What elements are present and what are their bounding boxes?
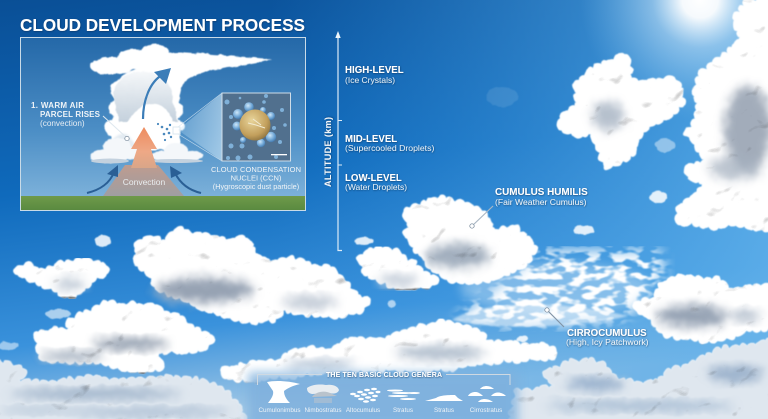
label: high level: (Ice Crystals) bbox=[345, 75, 395, 85]
cloud: lower right bank bbox=[512, 343, 768, 419]
label: cumulonimbus: Cumulonimbus bbox=[258, 407, 300, 414]
label: mid level: MID-LEVEL bbox=[345, 134, 397, 145]
cloud: cirrocumulus patchwork bbox=[452, 250, 665, 328]
label: low level bbox=[345, 173, 407, 192]
magnifier beam bbox=[178, 93, 222, 161]
label: mid level bbox=[345, 134, 434, 153]
ground bbox=[21, 196, 305, 210]
label: cloud condensation nuclei: NUCLEI (CCN) bbox=[231, 174, 282, 182]
cloud: lower centre bank bbox=[226, 325, 556, 378]
callout: cirrocumulus: CIRROCUMULUS bbox=[567, 328, 647, 339]
scale bar bbox=[271, 154, 287, 155]
label: stratus: Stratus bbox=[393, 407, 413, 414]
callout: cirrocumulus: (High, Icy Patchwork) bbox=[566, 337, 649, 347]
label: high level bbox=[345, 65, 404, 85]
label: mid level: (Supercooled Droplets) bbox=[345, 143, 434, 153]
label: nimbostratus: Nimbostratus bbox=[304, 407, 342, 414]
cloud: small cumulus below altitude axis bbox=[363, 251, 433, 286]
droplets bbox=[157, 123, 172, 141]
label: cloud condensation nuclei bbox=[211, 165, 301, 191]
callout: warm air parcel: PARCEL RISES bbox=[40, 110, 101, 119]
label: altocumulus: Altocumulus bbox=[346, 407, 380, 414]
label: low level: (Water Droplets) bbox=[345, 182, 407, 192]
cloud: top right large cumulus bbox=[680, 0, 768, 228]
label: stratus second: Stratus bbox=[434, 407, 454, 414]
icon: stratus bbox=[387, 390, 420, 414]
legend backdrop haze bbox=[248, 372, 518, 419]
icon: nimbostratus bbox=[304, 384, 342, 414]
label: cloud condensation nuclei: (Hygroscopic dust particle) bbox=[213, 182, 299, 191]
label: low level: LOW-LEVEL bbox=[345, 173, 402, 184]
micrograph of condensation nucleus bbox=[222, 93, 290, 161]
label: cirrostratus: Cirrostratus bbox=[470, 407, 502, 414]
cumulonimbus cloud bbox=[90, 44, 272, 164]
cloud: left small cumulus bbox=[20, 262, 106, 295]
cloud: small wisps bbox=[0, 87, 675, 350]
icon: stratus flat bbox=[425, 395, 463, 414]
callout: warm air parcel: (convection) bbox=[40, 119, 85, 128]
cloud: upper centre-right cumulus bbox=[562, 57, 680, 164]
cloud: right mid cumulus bbox=[638, 280, 768, 339]
panel: cloud development inset bbox=[20, 38, 306, 210]
convection cone bbox=[103, 165, 184, 196]
callout: warm air parcel: 1. WARM AIR bbox=[31, 101, 84, 110]
altitude axis bbox=[323, 31, 342, 250]
updraft arrow bbox=[143, 68, 171, 119]
icon: cumulonimbus bbox=[258, 381, 300, 414]
callout: cumulus humilis bbox=[470, 187, 588, 228]
label: convection: Convection bbox=[123, 177, 166, 187]
callout: cumulus humilis: (Fair Weather Cumulus) bbox=[495, 197, 587, 207]
label: cloud condensation nuclei: CLOUD CONDENSATION bbox=[211, 165, 301, 174]
title: CLOUD DEVELOPMENT PROCESS bbox=[20, 15, 305, 35]
callout: cumulus humilis: CUMULUS HUMILIS bbox=[495, 187, 588, 198]
legend title: THE TEN BASIC CLOUD GENERA bbox=[326, 372, 442, 379]
label: high level: HIGH-LEVEL bbox=[345, 65, 404, 76]
icon: altocumulus bbox=[346, 388, 380, 414]
label: altitude: ALTITUDE (km) bbox=[323, 117, 333, 187]
cloud: cumulus humilis bbox=[408, 202, 532, 280]
callout: warm air parcel bbox=[31, 101, 129, 141]
cloud: mid left stacked cumulus bbox=[38, 305, 211, 367]
inflow arrow left bbox=[87, 165, 118, 193]
inflow arrow right bbox=[170, 166, 201, 193]
callout: cirrocumulus bbox=[545, 308, 649, 347]
cloud: large central-left cumulus bbox=[139, 232, 366, 319]
convection arrow bbox=[131, 127, 157, 168]
legend: ten basic cloud genera bbox=[258, 372, 510, 414]
dust particle bbox=[240, 110, 270, 140]
cloud: lower left bank bbox=[0, 366, 245, 419]
icon: cirrostratus bbox=[468, 386, 506, 414]
